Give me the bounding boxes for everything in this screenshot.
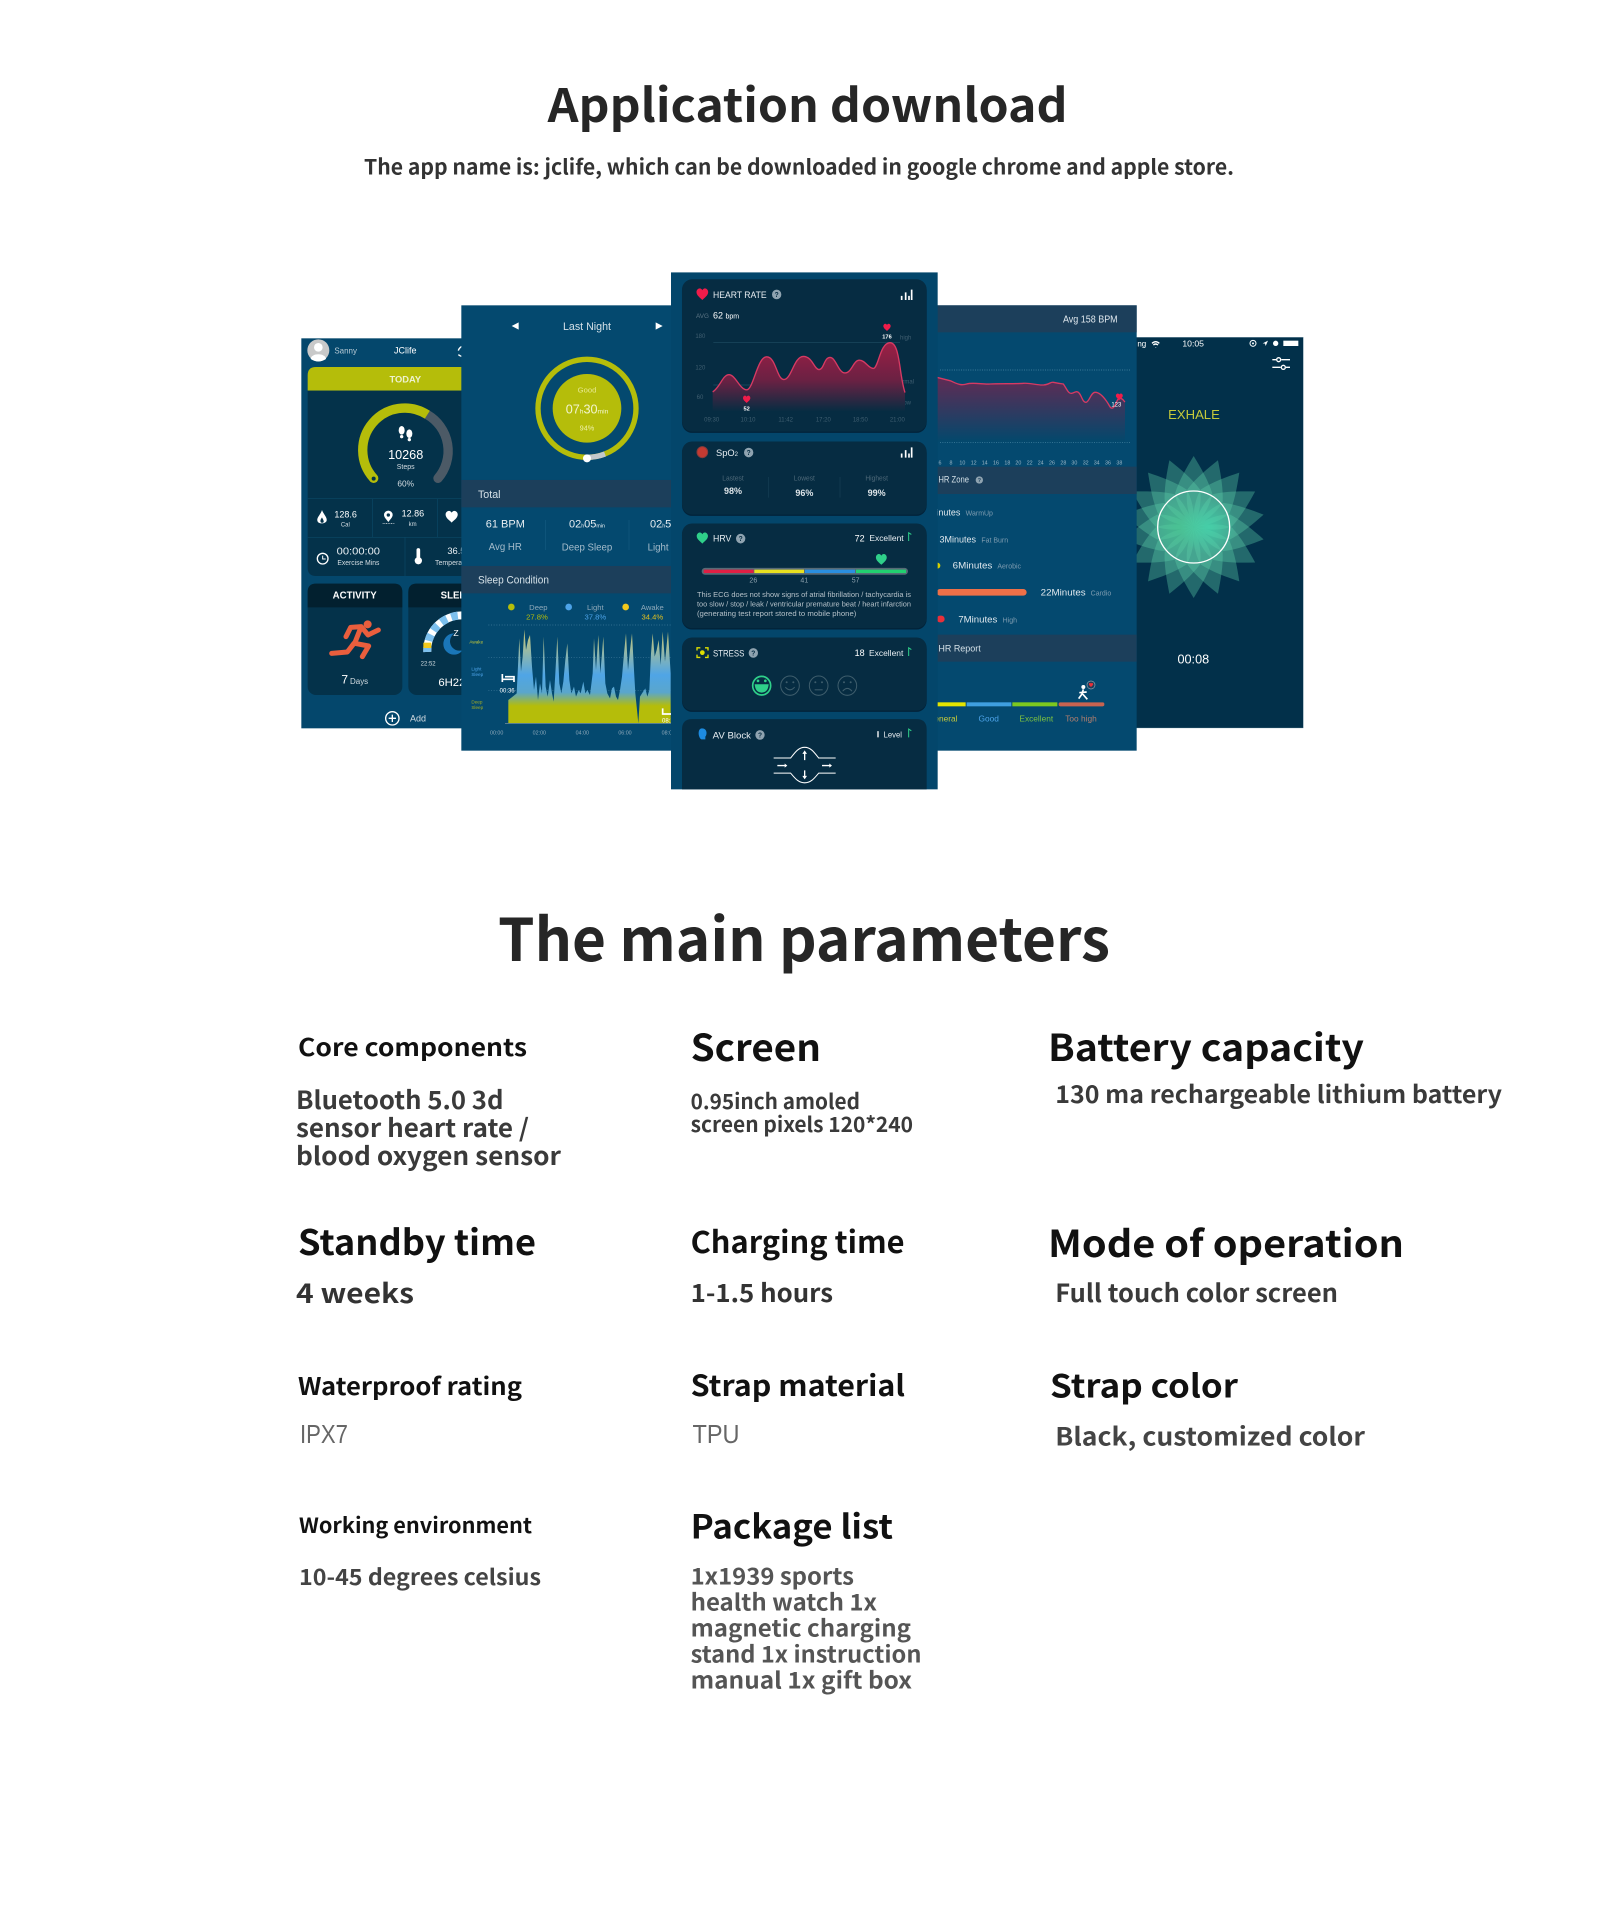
status icons: [1250, 340, 1298, 346]
card: SpO2: Lowest: [794, 475, 815, 482]
parameter: screen: [691, 1018, 913, 1139]
sleep stage chart: 08:12: [662, 719, 678, 725]
heart rate line chart: 36: [1105, 460, 1111, 466]
phone screen 4: heart rate report: Avg 158 BPM: [1063, 315, 1118, 326]
sleep score ring: 94%: [580, 424, 595, 433]
sleep stage chart: 00:36: [500, 689, 515, 695]
heart rate line chart: 28: [1060, 460, 1066, 466]
card: SpO2: 98%: [724, 486, 742, 496]
HR zone list: [929, 507, 1111, 624]
phone screen 1: activity dashboard: 00:00:00: [337, 546, 380, 557]
sleep stage chart: 04:00: [576, 730, 589, 736]
card: HRV: 26: [749, 576, 757, 584]
sleep score ring: 07h30min: [566, 402, 609, 416]
heart rate chart: 52: [744, 406, 750, 413]
phone screen 1: activity dashboard: [301, 338, 517, 728]
card: SpO2: SpO2: [716, 448, 739, 459]
steps gauge: [363, 408, 448, 483]
icon: face scan: [697, 648, 708, 657]
sleep stage chart: Sleep: [471, 672, 484, 677]
parameter: charging time: Charging time: [691, 1218, 905, 1262]
card: heart rate: [682, 279, 927, 433]
card: SpO2: Lastest: [722, 475, 744, 482]
parameter: waterproof rating: Waterproof rating: [298, 1367, 522, 1402]
sleep card: 22:52: [421, 662, 436, 668]
card: SpO2: 99%: [868, 488, 886, 498]
parameter: battery capacity: Battery capacity: [1048, 1018, 1364, 1072]
sleep stage chart: Awake: [469, 639, 484, 644]
icon: wifi: [1152, 342, 1159, 347]
phone screen 4: heart rate report: [928, 305, 1137, 751]
heart rate chart: 18:50: [853, 416, 868, 424]
heart rate chart: 11:42: [778, 416, 794, 424]
HR zone list: High: [1003, 617, 1017, 624]
heart rate chart: 09:30: [704, 416, 720, 424]
heart rate chart: 10:10: [740, 416, 756, 424]
phone screen 1: activity dashboard: 12.86: [402, 509, 424, 519]
HR zone list: 6Minutes: [953, 561, 993, 571]
phone screen 2: sleep report: Total: [478, 489, 501, 501]
clock icon: [323, 556, 326, 559]
heart rate chart: high: [900, 334, 911, 342]
card: SpO2: 96%: [795, 488, 813, 498]
phone screen 2: sleep report: [461, 305, 696, 751]
card: AV block: AV Block: [713, 730, 751, 740]
parameter: strap color: Strap color: [1050, 1362, 1238, 1408]
card: HRV: Excellent: [869, 534, 905, 543]
heart rate chart: 17:20: [816, 416, 831, 424]
parameter: charging time: [691, 1218, 905, 1310]
phone screen 2: sleep report: Sleep Condition: [478, 575, 549, 587]
parameter: core components: [296, 1028, 561, 1173]
parameter: strap material: Strap material: [691, 1363, 905, 1405]
icon: blood drop gauge: [697, 447, 708, 458]
parameter: mode of operation: Full touch color screen: [1055, 1274, 1338, 1310]
HR zone list: 7Minutes: [958, 614, 998, 624]
parameter: working environment: Working environment: [299, 1510, 532, 1540]
phone screen 1: activity dashboard: Exercise Mins: [337, 560, 380, 567]
sleep legend: Awake: [641, 603, 664, 612]
parameter: battery capacity: [1048, 1018, 1502, 1110]
total stats: Light Sleep: [648, 543, 696, 554]
heart rate chart: 180: [695, 333, 706, 340]
card: HRV: This ECG does not show signs of atrial fibrillation / tachycardia is: [697, 590, 911, 599]
add button: [386, 712, 426, 725]
heart rate chart: 120: [695, 364, 706, 372]
card: HRV: too slow / stop / leak / ventricular premature beat / heart infarction: [697, 599, 911, 608]
card: stress: ?: [751, 650, 755, 657]
heart rate line chart: 22: [1027, 460, 1033, 466]
icon: runner marker: [1079, 681, 1095, 699]
parameter: strap material: [691, 1363, 905, 1449]
card: HRV: 72: [855, 533, 865, 543]
card: heart rate: 62 bpm: [713, 310, 739, 321]
card: HRV: ?: [739, 536, 743, 543]
activity card: 7: [341, 673, 348, 687]
parameter: core components: Bluetooth 5.0 3d: [296, 1081, 504, 1117]
card: SpO2: Highest: [865, 475, 888, 482]
phone screen 4: heart rate report: HR Report: [938, 644, 981, 654]
parameter: standby time: Standby time: [298, 1215, 536, 1266]
sleep stage chart: 06:00: [618, 730, 632, 736]
HR report scale: General: [928, 714, 958, 724]
heart rate chart: 21:00: [890, 416, 905, 424]
parameter: mode of operation: Mode of operation: [1048, 1214, 1404, 1268]
activity card: Days: [350, 677, 368, 686]
breathing flower: [1121, 454, 1267, 600]
heart rate chart: low: [902, 399, 912, 406]
parameter: standby time: [296, 1215, 536, 1311]
phone screen 1: activity dashboard: Steps: [397, 464, 415, 471]
heart rate chart: normal: [896, 378, 914, 385]
heart rate line chart: 123: [1111, 403, 1122, 409]
card: SpO2: ?: [747, 450, 751, 457]
parameter: package list: [691, 1500, 922, 1696]
sleep stage chart: Sleep: [471, 705, 484, 710]
HR zone list: 22Minutes: [1041, 588, 1086, 598]
phone screen 4: heart rate report: HR Zone: [938, 475, 969, 485]
card: heart rate: AVG: [696, 313, 709, 320]
avatar: [307, 339, 329, 361]
heart rate line chart: 26: [1049, 460, 1055, 466]
location icon: [384, 511, 393, 522]
total stats: Avg HR: [489, 542, 522, 553]
HR zone list: WarmUp: [966, 510, 993, 517]
average bpm header: [937, 305, 1137, 332]
parameter: strap material: TPU: [692, 1419, 740, 1449]
phone screen 1: activity dashboard: Sanny: [334, 345, 358, 355]
parameter: battery capacity: 130 ma rechargeable lithium battery: [1055, 1075, 1502, 1110]
heart rate chart: 176: [882, 334, 892, 341]
parameter: mode of operation: [1048, 1214, 1404, 1310]
parameter: standby time: 4 weeks: [296, 1272, 414, 1311]
activity card: ACTIVITY: [333, 591, 377, 602]
heart rate line chart: 24: [1038, 460, 1044, 466]
parameter: package list: manual 1x gift box: [691, 1662, 912, 1696]
phone screen 1: activity dashboard: 128.6: [334, 509, 357, 519]
HR zone list: 3Minutes: [940, 534, 976, 544]
sleep stage chart: Light: [471, 667, 482, 672]
HR zone list: Aerobic: [997, 564, 1022, 571]
sleep legend: 34.4%: [641, 612, 663, 621]
sleep legend: Deep: [529, 603, 547, 612]
total stats: 61 BPM: [486, 519, 525, 531]
parameter: core components: sensor heart rate /: [296, 1109, 529, 1145]
parameter: charging time: 1-1.5 hours: [691, 1274, 833, 1310]
sleep card: 6H22: [438, 677, 465, 689]
add button: Add: [410, 714, 426, 724]
icon: runner: [332, 620, 378, 657]
parameter: screen: 0.95inch amoled: [691, 1086, 860, 1116]
parameter: package list: stand 1x instruction: [691, 1636, 922, 1670]
thermometer icon: [413, 550, 424, 557]
card: SpO2: [682, 441, 927, 516]
icon: bars: [902, 290, 912, 300]
heart rate chart: [695, 324, 914, 424]
sleep legend: 37.8%: [584, 612, 606, 621]
card: HRV: [682, 523, 927, 630]
phone screen 1: activity dashboard: 36.5: [447, 546, 465, 556]
total header: [461, 480, 695, 507]
mood faces: [753, 676, 857, 695]
card: heart rate: HEART RATE: [713, 290, 767, 300]
heart rate line chart: 12: [971, 460, 977, 466]
heart rate line chart: 10: [959, 460, 965, 466]
heart rate line chart: 18: [1004, 460, 1010, 466]
heart rate line chart: 38: [1116, 460, 1122, 466]
heart rate chart: 60: [697, 394, 704, 401]
card: stress: STRESS: [713, 648, 744, 658]
sleep stage chart: 08:00: [662, 730, 675, 736]
parameter: waterproof rating: IPX7: [300, 1419, 348, 1449]
HR report scale: Too high: [1065, 714, 1097, 724]
total stats: Deep Sleep: [562, 543, 612, 554]
HR report scale: Good: [978, 714, 999, 724]
phone screen 4: heart rate report: ?: [978, 478, 981, 484]
HR zone header: [937, 467, 1137, 494]
heart rate line chart: 8: [950, 460, 953, 466]
flame icon: [317, 510, 327, 523]
card: stress: [682, 637, 927, 712]
phone screen 1: activity dashboard: Temperature: [435, 560, 474, 567]
sleep stage chart: 00:00: [490, 730, 503, 736]
sleep legend: [508, 603, 664, 621]
date navigator: [512, 321, 663, 333]
parameter: screen: Screen: [691, 1018, 821, 1072]
parameter: working environment: [299, 1510, 541, 1592]
activity card: [308, 584, 402, 695]
heart rate line chart: 6: [939, 460, 942, 466]
card: HRV: 41: [800, 576, 808, 584]
title: Application download: Application download: [547, 70, 1068, 136]
parameter: strap color: [1050, 1362, 1365, 1454]
heart rate line chart: 34: [1094, 460, 1100, 466]
parameter: package list: Package list: [691, 1500, 893, 1548]
HR zone list: Cardio: [1091, 591, 1111, 598]
sleep stage chart: Deep: [471, 700, 483, 705]
phone screen 1: activity dashboard: JClife: [394, 346, 416, 356]
HR zone list: Fat Burn: [981, 537, 1008, 544]
today tab: [308, 367, 517, 391]
date navigator: Last Night: [563, 321, 611, 333]
parameter: screen: screen pixels 120*240: [691, 1109, 913, 1139]
card: HRV: (generating test report stored to mobile phone): [697, 609, 856, 618]
icon: valve diagram: [774, 747, 836, 783]
phone screen 1: activity dashboard: km: [409, 522, 417, 528]
card: heart rate: ?: [775, 292, 779, 299]
card: AV block: ?: [758, 732, 762, 739]
sleep score ring: [538, 359, 636, 462]
heart rate line chart: 14: [982, 460, 988, 466]
heart rate line chart: 30: [1071, 460, 1077, 466]
parameter: package list: health watch 1x: [691, 1584, 877, 1618]
HR report scale: [928, 681, 1104, 724]
icon: settings sliders: [1272, 358, 1290, 369]
phone screen 1: activity dashboard: 10268: [388, 448, 423, 462]
timer: 00:08: [1177, 653, 1209, 667]
phone screen 1: activity dashboard: 60%: [397, 478, 415, 488]
icon: head: [699, 728, 707, 739]
parameter: working environment: 10-45 degrees celsius: [299, 1560, 541, 1592]
heart rate line chart: [937, 370, 1131, 466]
phone screen 5: breathing exercise: ng: [1137, 340, 1146, 349]
sleep score ring: Good: [578, 386, 596, 395]
subtitle: app name: The app name is: jclife, which can be downloaded in google chrome and apple store.: [364, 152, 1234, 182]
phone screen 3: health metrics: [671, 272, 938, 789]
sleep card: Z: [453, 628, 459, 638]
HR report header: [937, 635, 1137, 662]
sleep card: [408, 584, 515, 695]
heart rate line chart: 20: [1015, 460, 1021, 466]
parameter: strap color: Black, customized color: [1055, 1418, 1365, 1454]
sleep stage chart: [469, 625, 678, 736]
sleep legend: Light: [587, 603, 605, 612]
heart rate line chart: 16: [993, 460, 999, 466]
parameter: package list: magnetic charging: [691, 1610, 911, 1644]
parameter: core components: Core components: [298, 1028, 527, 1063]
phone screen 5: breathing exercise: [1107, 337, 1303, 728]
total stats: [486, 519, 696, 554]
total stats: 02h50: [650, 519, 677, 531]
card: HRV: HRV: [713, 534, 732, 544]
card: HRV: 57: [852, 576, 860, 584]
phone screen 1: activity dashboard: Cal: [341, 523, 350, 529]
footprints icon: [399, 426, 412, 441]
card: stress: 18: [855, 648, 865, 658]
card: AV block: [682, 719, 927, 789]
card: stress: Excellent: [869, 649, 904, 658]
heart rate line chart: 32: [1083, 460, 1089, 466]
card: AV block: Level: [884, 731, 902, 740]
total stats: 02h05min: [569, 519, 605, 531]
parameter: package list: 1x1939 sports: [691, 1558, 854, 1592]
sleep condition header: [461, 566, 695, 593]
HR report scale: Excellent: [1019, 714, 1054, 724]
sleep card: SLEEP: [441, 591, 473, 602]
exhale label: EXHALE: [1168, 408, 1220, 422]
sleep legend: 27.8%: [526, 612, 548, 621]
parameter: core components: blood oxygen sensor: [296, 1137, 561, 1173]
HR zone list: Minutes: [929, 507, 961, 517]
phone screen 1: activity dashboard: TODAY: [390, 375, 422, 385]
parameter: waterproof rating: [298, 1367, 522, 1449]
section heading: The main parameters: The main parameters: [498, 893, 1110, 978]
phone screen 5: breathing exercise: 10:05: [1182, 338, 1204, 348]
sleep stage chart: 02:00: [533, 730, 546, 736]
steps panel: [308, 391, 517, 576]
